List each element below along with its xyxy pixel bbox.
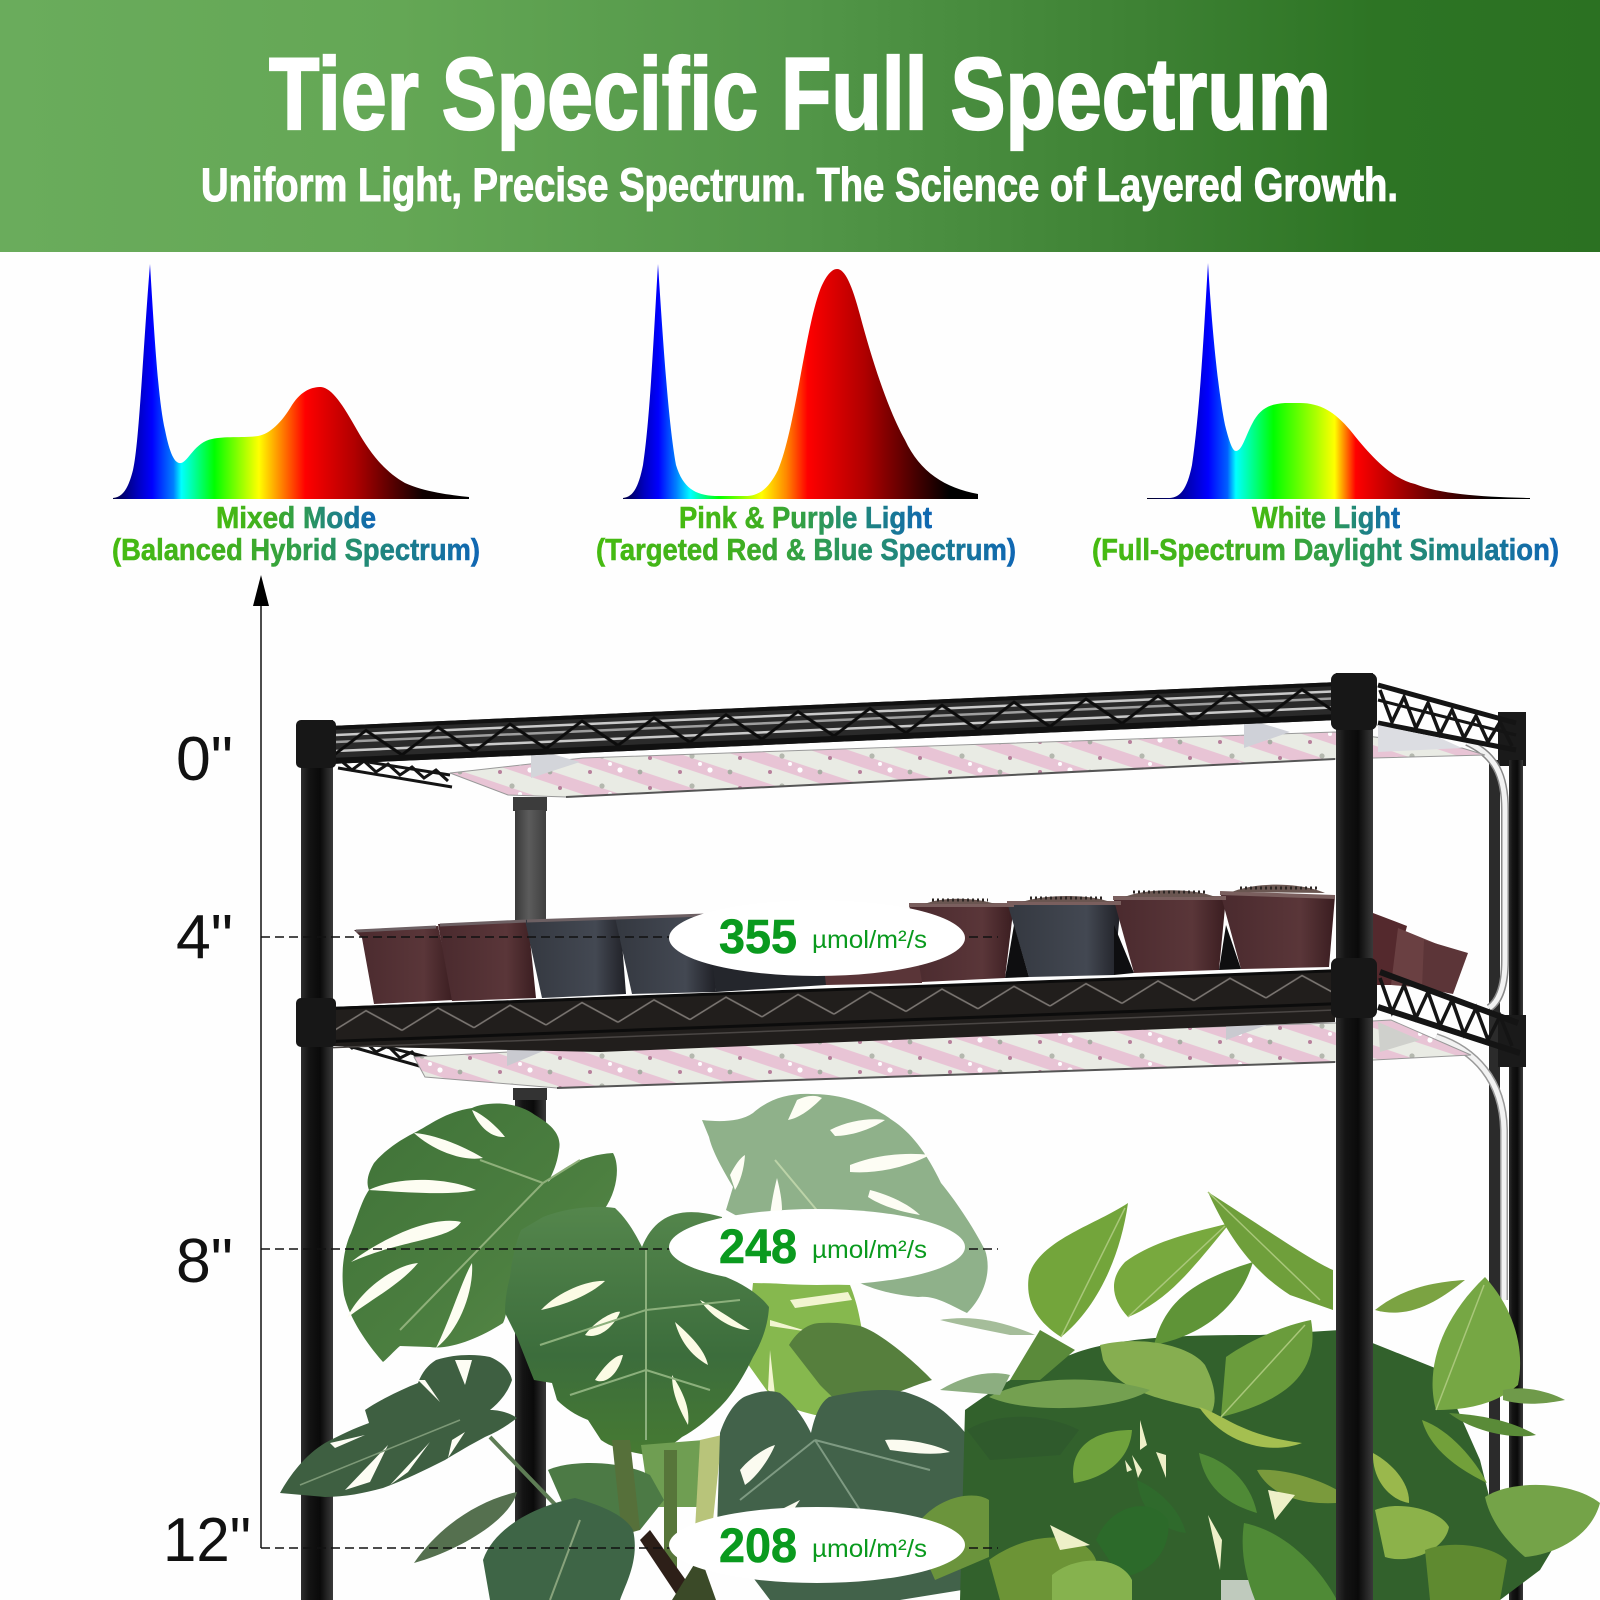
pothos veins [1061,1192,1484,1417]
left side rail [337,1035,427,1067]
callout: 355 at 4 inches: 355 [719,911,797,964]
wire shelf front [330,682,1335,764]
left large leaf [343,1104,617,1362]
callout: 248 at 8 inches [669,1209,965,1285]
small dark left leaf [280,1355,517,1497]
pot rims [909,893,1335,905]
callout: 355 at 4 inches: µmol/m²/s [812,926,927,954]
label: mixed mode: Mixed Mode [216,500,376,535]
spectrum chart: mixed mode [112,264,480,567]
upper leaves [1028,1203,1128,1337]
height labels: 4" [176,903,233,972]
pot row left [354,926,454,1004]
callout: 208 at 12 inches: 208 [719,1520,797,1573]
callout: 248 at 8 inches: 248 [719,1221,797,1274]
height labels [163,725,251,1575]
monstera plant [343,1094,989,1600]
spectrum chart: white light [1092,263,1559,567]
foliage mass [960,1330,1570,1600]
top shelf with light panel [330,682,1516,797]
middle shelf with light panel [330,969,1520,1088]
pale upper leaf [702,1094,988,1313]
pothos plant [913,1192,1600,1600]
label: pink and purple light [596,500,1016,567]
soil [925,885,1325,904]
label: white light [1092,500,1559,567]
label: pink and purple light: (Targeted Red & Blue Spectrum) [596,532,1016,567]
LED light panel [450,732,1485,797]
title: Tier Specific Full Spectrum [269,37,1331,151]
callout: 208 at 12 inches [669,1507,965,1583]
left side rail [336,757,452,787]
label: mixed mode: (Balanced Hybrid Spectrum) [112,532,480,567]
height labels: 12" [163,1506,251,1575]
callout: 355 at 4 inches [669,900,965,976]
height labels: 8" [176,1227,233,1296]
right leaves [1375,1280,1465,1313]
label: white light: White Light [1252,500,1400,535]
mounting clips [507,1034,560,1066]
front posts of the shelf [296,673,1377,1600]
right side rail [1378,685,1516,750]
pot row right [909,904,1014,982]
header banner [0,0,1600,252]
label: pink and purple light: Pink & Purple Light [679,500,932,535]
height labels: 0" [176,725,233,794]
pale gaps [1050,1420,1295,1570]
LED light panel [414,1020,1471,1088]
cables on the right [1436,742,1505,1300]
pot rim [1221,1580,1284,1600]
bright back leaf [745,1283,880,1415]
wire shelf front [330,970,1335,1052]
callout: 208 at 12 inches: µmol/m²/s [812,1535,927,1563]
height axis arrow [253,575,269,1548]
middle and lower leaves [967,1417,1079,1460]
spectrum chart: pink and purple light [596,264,1016,567]
dark lower right leaf [717,1390,989,1600]
dark green small leaf [789,1323,932,1410]
mounting clips [531,748,580,778]
potted seedlings on the shelf [354,885,1468,1004]
right side rail [1378,972,1520,1053]
label: mixed mode [112,500,480,567]
center large leaf [505,1207,769,1455]
lower stems and leaves [641,1440,704,1507]
callout: 248 at 8 inches: µmol/m²/s [812,1236,927,1264]
back posts of the shelf [513,712,1526,1600]
dashed level lines [261,937,998,1548]
